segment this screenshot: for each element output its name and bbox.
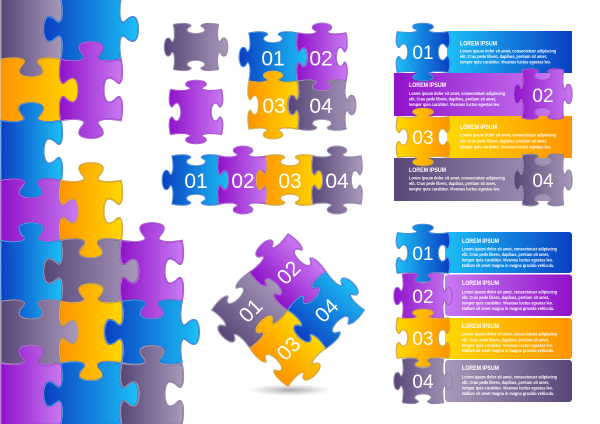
puzzle piece: orange row 6 centre xyxy=(60,284,122,380)
puzzle piece: blue row 5 xyxy=(1,223,62,319)
banner 04: tempor quis curabitur. Vivamus luctus egestas leo. xyxy=(409,186,500,192)
piece 02: 02 xyxy=(309,48,333,70)
banner 03: LOREM IPSUM xyxy=(460,125,497,131)
piece 01: 01 xyxy=(261,48,285,70)
banner 02 xyxy=(394,73,557,116)
stacked banner 01: Lorem ipsum dolor sit amet, consectetuer adipiscing xyxy=(462,246,557,252)
banner piece 02 xyxy=(514,69,572,119)
stacked banner 03: tempor quis curabitur. Vivamus luctus egestas leo. xyxy=(462,343,553,348)
panel: large jigsaw puzzle wall xyxy=(1,0,199,424)
piece 01: 01 xyxy=(184,170,208,193)
stacked piece 02 xyxy=(394,273,452,319)
stacked banner 04: LOREM IPSUM xyxy=(462,366,499,372)
banner 03: Lorem ipsum dolor sit amet, consectetuer adipiscing xyxy=(460,132,556,138)
stacked banner 02 xyxy=(445,274,572,316)
banner piece 03: 03 xyxy=(412,128,434,149)
stacked banner 04: Lorem ipsum dolor sit amet, consectetuer adipiscing xyxy=(462,375,557,380)
banner 04: Lorem ipsum dolor sit amet, consectetuer adipiscing xyxy=(409,176,505,180)
puzzle piece: blue row 6 right xyxy=(105,300,199,364)
puzzle piece: purple row 4 xyxy=(1,179,78,243)
stacked banner 02: tempor quis curabitur. Vivamus luctus egestas leo. xyxy=(462,300,553,306)
stacked banner 04: tempor quis curabitur. Vivamus luctus egestas leo. xyxy=(462,386,553,391)
puzzle piece: grey row 6 left xyxy=(1,300,78,364)
stacked banner 02: Nullam sit amet magna in magna gravida vehicula. xyxy=(462,306,554,311)
banner piece 03 xyxy=(396,108,450,166)
panel: rotated diamond puzzle xyxy=(203,225,373,395)
panel: stacked banner list xyxy=(394,224,572,404)
piece 04 xyxy=(279,263,373,357)
piece 02 xyxy=(218,146,268,214)
piece 04: 04 xyxy=(309,95,333,118)
banner 01: tempor quis curabitur. Vivamus luctus egestas leo. xyxy=(460,60,551,64)
piece 03 xyxy=(241,301,335,395)
stacked banner 03: LOREM IPSUM xyxy=(462,324,499,330)
stacked banner 01: LOREM IPSUM xyxy=(462,239,499,245)
puzzle piece: purple row 5 right xyxy=(121,223,183,319)
banner 03: elit. Cras pede libero, dapibus, pretium sit amet, xyxy=(460,138,547,144)
banner 04: elit. Cras pede libero, dapibus, pretium sit amet, xyxy=(409,181,496,186)
stacked banner 01: elit. Cras pede libero, dapibus, pretium sit amet, xyxy=(462,252,549,257)
banner 01: LOREM IPSUM xyxy=(460,42,497,48)
stacked banner 02: Lorem ipsum dolor sit amet, consectetuer adipiscing xyxy=(462,290,557,294)
puzzle piece: purple bottom left xyxy=(1,346,62,424)
stacked piece 04 xyxy=(394,358,452,404)
piece 02: 02 xyxy=(231,170,255,193)
banner 03 xyxy=(447,116,572,158)
banner 04: LOREM IPSUM xyxy=(409,168,446,174)
banner 01: elit. Cras pede libero, dapibus, pretium sit amet, xyxy=(460,54,547,59)
piece 04: 04 xyxy=(325,170,349,193)
banner piece 04 xyxy=(514,154,572,206)
panel: horizontal numbered puzzle chain xyxy=(162,146,362,214)
panel: staggered banner list xyxy=(394,23,572,206)
banner 02: LOREM IPSUM xyxy=(409,83,446,89)
piece 01 xyxy=(203,263,297,357)
banner 01: Lorem ipsum dolor sit amet, consectetuer adipiscing xyxy=(460,48,556,54)
stacked piece 01 xyxy=(396,224,450,282)
piece 02: 02 xyxy=(273,257,305,289)
piece 01 xyxy=(162,155,230,205)
piece 03: 03 xyxy=(262,95,286,118)
piece 03: 03 xyxy=(278,170,302,193)
banner piece 01: 01 xyxy=(412,43,434,64)
piece 04: 04 xyxy=(311,294,344,327)
stacked piece 04: 04 xyxy=(412,372,434,393)
banner 02: elit. Cras pede libero, dapibus, pretium sit amet, xyxy=(409,96,496,102)
banner piece 04: 04 xyxy=(532,171,554,192)
stacked banner 02: LOREM IPSUM xyxy=(462,281,499,287)
stacked banner 01 xyxy=(445,232,572,273)
shadow under diamond puzzle xyxy=(248,384,332,396)
banner 01 xyxy=(447,31,572,73)
panel: square numbered puzzle xyxy=(239,23,356,139)
banner 04 xyxy=(394,158,557,201)
piece 03: 03 xyxy=(273,333,305,365)
stacked banner 01: tempor quis curabitur. Vivamus luctus egestas leo. xyxy=(462,258,553,263)
stacked piece 02: 02 xyxy=(412,287,434,308)
banner 02: tempor quis curabitur. Vivamus luctus egestas leo. xyxy=(409,102,500,107)
stacked banner 01: Nullam sit amet magna in magna gravida vehicula. xyxy=(462,263,554,268)
banner 03: tempor quis curabitur. Vivamus luctus egestas leo. xyxy=(460,144,551,150)
puzzle piece: grey bottom right xyxy=(121,346,183,424)
piece 02 xyxy=(241,225,335,319)
piece 03 xyxy=(256,155,324,205)
stacked banner 03: Nullam sit amet magna in magna gravida vehicula. xyxy=(462,348,554,353)
stacked banner 03 xyxy=(445,318,572,359)
stacked banner 04 xyxy=(445,360,572,402)
stacked banner 03: elit. Cras pede libero, dapibus, pretium sit amet, xyxy=(462,337,549,342)
piece 04 xyxy=(312,146,362,214)
puzzle piece: purple row 2 xyxy=(60,42,122,138)
stacked banner 04: elit. Cras pede libero, dapibus, pretium sit amet, xyxy=(462,380,549,385)
piece 01: 01 xyxy=(235,295,267,327)
puzzle piece: blue bottom centre xyxy=(44,362,138,424)
stacked banner 03: Lorem ipsum dolor sit amet, consectetuer adipiscing xyxy=(462,332,557,337)
banner piece 02: 02 xyxy=(532,86,554,107)
stacked piece 03: 03 xyxy=(412,329,434,350)
puzzle piece: orange row 4 xyxy=(60,163,122,259)
banner piece 01 xyxy=(396,23,450,81)
stacked banner 02: elit. Cras pede libero, dapibus, pretium sit amet, xyxy=(462,295,549,300)
puzzle piece: orange row 2 xyxy=(1,58,78,122)
puzzle piece: blue top xyxy=(44,0,138,61)
stacked banner 04: Nullam sit amet magna in magna gravida vehicula. xyxy=(462,391,554,396)
stacked piece 03 xyxy=(396,309,450,367)
puzzle piece: grey row 5 centre xyxy=(44,239,138,303)
puzzle piece: grey top-left xyxy=(1,0,62,77)
puzzle piece: single purple xyxy=(169,80,223,144)
puzzle piece: single grey xyxy=(164,23,228,71)
puzzle piece: blue row 3 xyxy=(1,103,62,199)
stacked piece 01: 01 xyxy=(412,244,434,265)
banner 02: Lorem ipsum dolor sit amet, consectetuer adipiscing xyxy=(409,91,505,96)
